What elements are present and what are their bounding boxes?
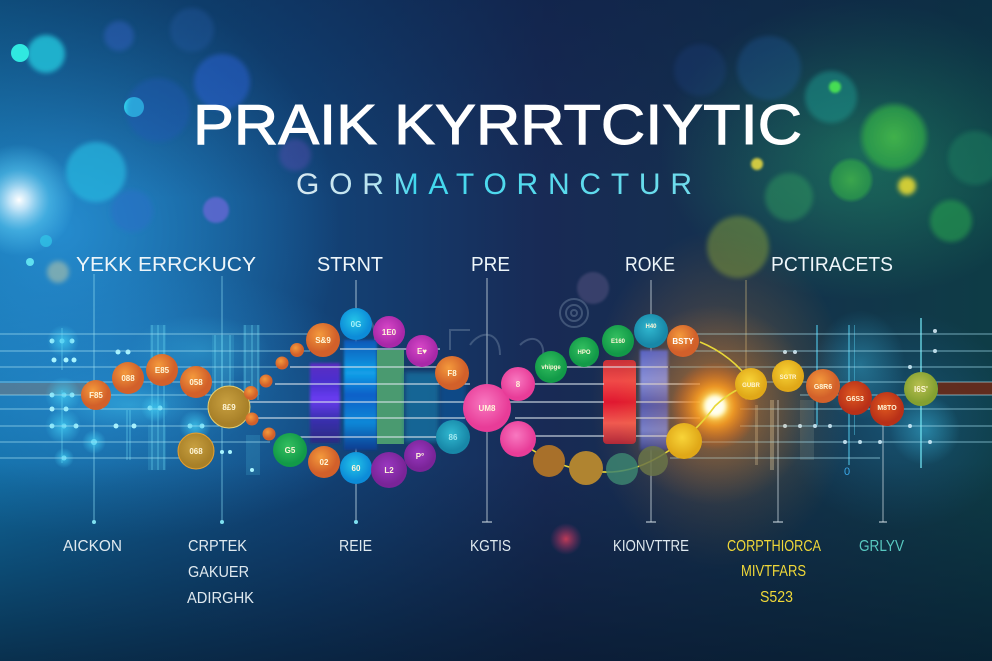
small connecting beads (244, 343, 304, 440)
horizontal signal lines (0, 334, 992, 458)
central bars (310, 340, 668, 450)
yellow connecting curve (518, 342, 752, 472)
upper strand left: F8 (447, 369, 457, 378)
lower strand left: P° (416, 452, 424, 461)
node row right: G6S3 (846, 396, 864, 403)
upper strand right: E160 (611, 339, 626, 345)
bottom labels: ADIRGHK (187, 590, 254, 607)
band behind axis (0, 382, 992, 395)
upper strand right: H40 (645, 324, 657, 330)
bottom labels: AICKON (63, 538, 122, 555)
node row right: M8TO (877, 405, 897, 412)
upper strand left (306, 308, 469, 390)
center pink node: UM8 (479, 404, 496, 413)
top labels: ROKE (625, 254, 675, 276)
upper strand left: 1E0 (382, 328, 397, 337)
rungs between strands (250, 349, 700, 437)
node row left: F85 (89, 391, 103, 400)
bottom labels (63, 538, 904, 607)
top labels: PCTIRACETS (771, 254, 893, 276)
bottom labels: MIVTFARS (741, 563, 806, 580)
bottom labels: S523 (760, 589, 793, 606)
node row left: 088 (121, 374, 135, 383)
title: PRAIK KYRRTCIYTIC (193, 93, 802, 157)
upper strand left: E♥ (417, 347, 427, 356)
node row right: GUBR (742, 383, 760, 389)
subtitle: GORMATORNCTUR (296, 168, 692, 201)
center pink node (463, 384, 511, 432)
bottom labels: KGTIS (470, 538, 511, 555)
top labels: PRE (471, 254, 510, 276)
bottom labels: GAKUER (188, 564, 249, 581)
bottom labels: REIE (339, 538, 372, 555)
top labels (76, 254, 893, 276)
DNA nodes (81, 308, 938, 488)
right data grid glow (755, 310, 960, 478)
node row left: 8£9 (222, 403, 236, 412)
bottom labels: CORPTHIORCA (727, 538, 821, 555)
bokeh lights: right (550, 36, 992, 555)
node row right (735, 360, 938, 426)
node row right: SGTR (780, 375, 797, 381)
central sun glow (614, 305, 814, 505)
upper strand left: 0G (351, 320, 361, 329)
left data grid glow (45, 315, 270, 475)
upper strand right: vhipge (541, 365, 561, 371)
right data grid glow: 0 (844, 466, 850, 478)
bokeh lights: left (0, 8, 311, 283)
top labels: YEKK ERRCKUCY (76, 254, 256, 276)
node row right: I6S' (914, 385, 928, 394)
node row right: G8R6 (814, 384, 832, 391)
node row left: 068 (189, 447, 203, 456)
bottom labels: CRPTEK (188, 538, 247, 555)
lower strand left (273, 420, 470, 488)
lower strand left: L2 (384, 466, 394, 475)
upper strand right (501, 314, 699, 401)
bottom labels: KIONVTTRE (613, 538, 689, 555)
vertical leader lines (92, 274, 887, 524)
bottom labels: GRLYV (859, 538, 904, 555)
upper strand left: S&9 (315, 336, 331, 345)
top labels: STRNT (317, 254, 383, 276)
upper strand right: 8 (516, 380, 521, 389)
upper strand right: BSTY (672, 337, 694, 346)
lower strand left: 02 (320, 458, 329, 467)
lower strand left: G5 (285, 446, 296, 455)
node row left: E85 (155, 366, 170, 375)
watermark swirl (350, 299, 588, 365)
node row left: 058 (189, 378, 203, 387)
lower strand right (500, 421, 702, 485)
upper strand right: HPO (577, 350, 591, 356)
lower strand left: 60 (352, 464, 361, 473)
lower strand left: 86 (449, 433, 458, 442)
node row left (81, 354, 250, 469)
